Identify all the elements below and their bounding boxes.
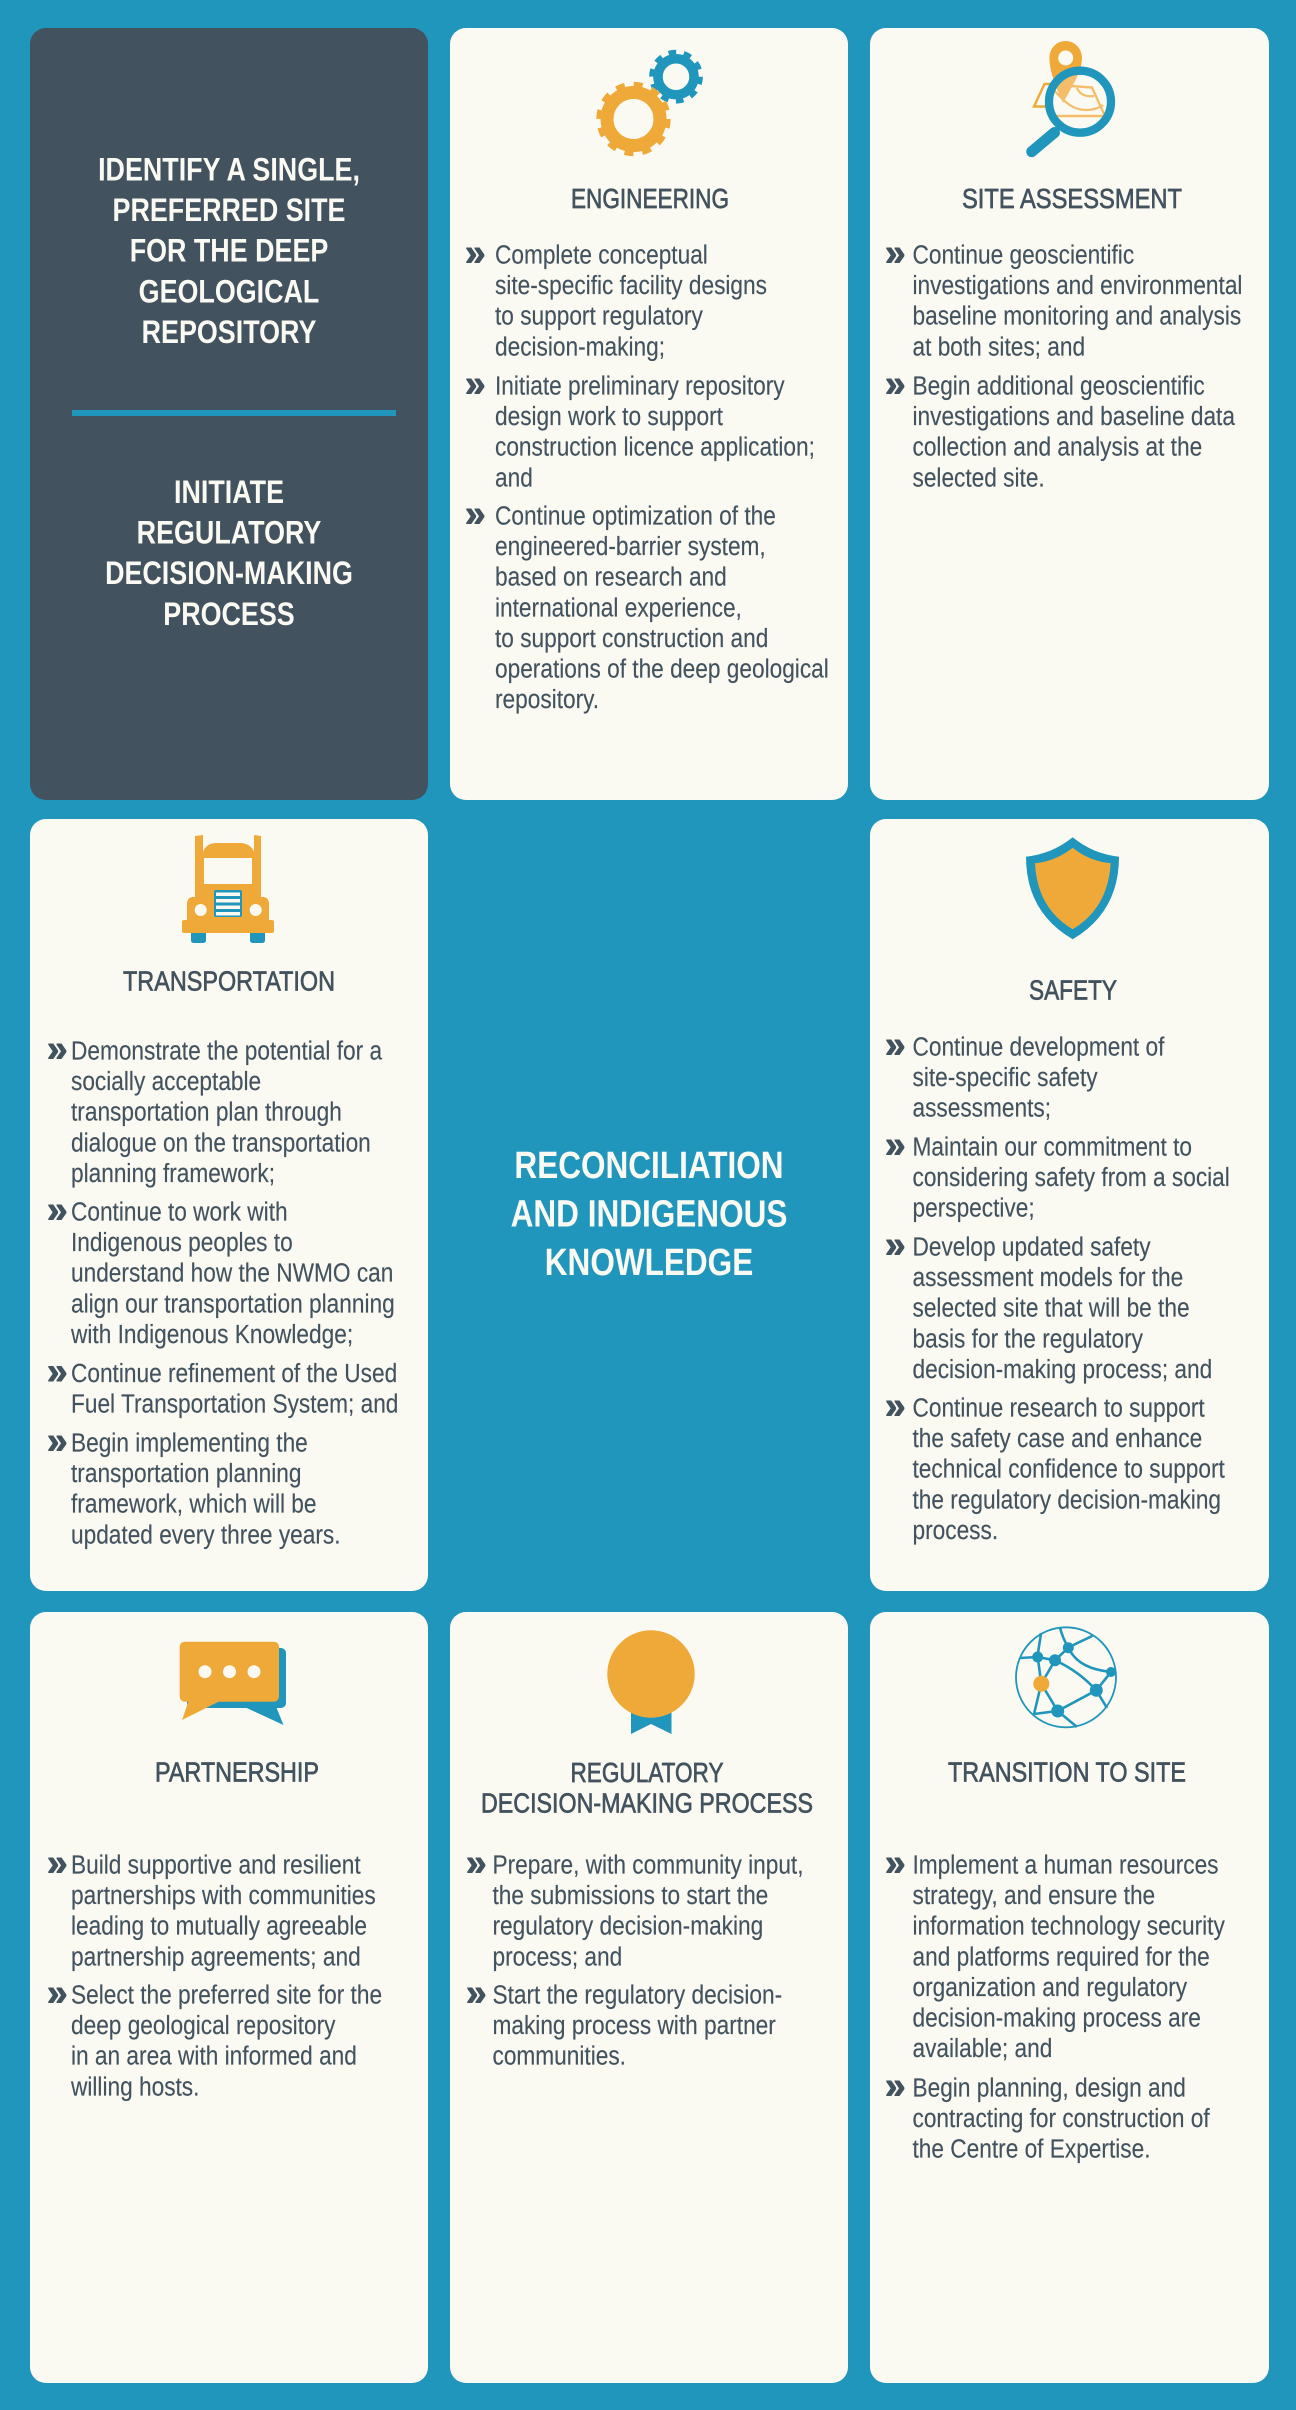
list item: Centre of Expertise: » (885, 2065, 906, 2106)
list item: safety assessments (885, 1024, 1165, 1123)
list item: select preferred site: in an area with informed and (71, 2042, 357, 2071)
list item: prepare submissions: regulatory decision-making (492, 1912, 763, 1941)
list item: conceptual designs: to support regulatory (495, 302, 704, 331)
list item: human resources strategy: and platforms required for the (912, 1943, 1210, 1972)
list item: start regulatory process: making process with partner (492, 2012, 776, 2040)
list item: start regulatory process: Start the regulatory decision- (492, 1981, 782, 2010)
list item: planning framework: transportation planning (71, 1460, 302, 1488)
list item: start regulatory process: » (466, 1972, 487, 2013)
heading: regulatory decision-making process: DECISION-MAKING PROCESS (481, 1788, 813, 1818)
heading: identify a single site: FOR THE DEEP (130, 234, 328, 269)
panel: goal (30, 28, 428, 800)
list item: conceptual designs: decision-making; (495, 333, 665, 362)
icon: shield (1026, 837, 1119, 939)
list item: transportation plan: planning framework; (71, 1160, 275, 1188)
list item: select preferred site: » (47, 1972, 68, 2013)
list item: social perspective (885, 1124, 1230, 1223)
list item: preliminary design (465, 363, 815, 493)
list item: Centre of Expertise (885, 2065, 1210, 2164)
center heading: reconciliation and Indigenous Knowledge: RECONCILIATION (514, 1144, 784, 1187)
list item: engineered-barrier optimization: international experience, (495, 594, 742, 623)
panel: engineering (450, 28, 848, 800)
list item: continue investigations: investigations and environmental (912, 272, 1242, 300)
heading: transportation: TRANSPORTATION (123, 966, 335, 996)
heading: site assessment: SITE ASSESSMENT (962, 183, 1182, 214)
list item: build partnerships: partnership agreements; and (71, 1943, 361, 1972)
list item: additional investigations (885, 363, 1235, 493)
list item: updated models: » (885, 1224, 906, 1265)
list item: continue investigations: Continue geoscientific (912, 241, 1134, 270)
heading: initiate regulatory process: INITIATE (174, 475, 284, 511)
list item: prepare submissions: the submissions to start the (492, 1882, 768, 1910)
list item: Centre of Expertise: the Centre of Expertise. (912, 2135, 1151, 2164)
heading: identify a single site: REPOSITORY (142, 315, 317, 350)
list item: conceptual designs: Complete conceptual (495, 241, 708, 270)
list item: continue investigations: at both sites; and (912, 333, 1085, 362)
list item: select preferred site: willing hosts. (70, 2073, 199, 2102)
list item: safety research: Continue research to support (912, 1394, 1205, 1423)
panel: regulatory decision-making process (450, 1612, 848, 2383)
list item: continue investigations: » (885, 232, 906, 273)
heading: identify a single site: GEOLOGICAL (139, 274, 319, 310)
list item: social perspective: perspective; (912, 1194, 1035, 1223)
list item: start regulatory process (466, 1972, 782, 2071)
list item: work with Indigenous peoples: align our transportation planning (71, 1290, 395, 1319)
list item: planning framework: » (47, 1420, 68, 1461)
heading: regulatory decision-making process (481, 1757, 813, 1818)
list item: preliminary design: construction licence application; (495, 433, 815, 462)
panel: partnership (30, 1612, 428, 2383)
list item: engineered-barrier optimization: to support construction and (495, 625, 768, 653)
list item: planning framework: updated every three years. (71, 1521, 341, 1550)
icon: gears (598, 52, 701, 154)
list item: select preferred site (47, 1972, 382, 2102)
heading: initiate regulatory process: DECISION-MAKING (105, 556, 353, 592)
list item: work with Indigenous peoples (47, 1189, 395, 1349)
list item: select preferred site: Select the preferred site for the (71, 1981, 382, 2010)
list item: social perspective: Maintain our commitment to (912, 1133, 1192, 1162)
center heading: reconciliation and Indigenous Knowledge: KNOWLEDGE (545, 1241, 753, 1284)
heading: initiate regulatory process: PROCESS (163, 597, 295, 632)
list item: continue investigations (885, 232, 1242, 362)
list item: transportation system: Continue refinement of the Used (71, 1360, 397, 1388)
list item: build partnerships: Build supportive and resilient (71, 1851, 361, 1880)
list item: work with Indigenous peoples: Indigenous peoples to (71, 1229, 293, 1257)
list item: transportation system (47, 1350, 398, 1419)
list item: human resources strategy: organization and regulatory (912, 1974, 1188, 2002)
list item: human resources strategy: decision-making process are (912, 2004, 1201, 2033)
list item: conceptual designs: site-specific facility designs (495, 272, 767, 300)
list item: safety assessments: Continue development of (912, 1033, 1165, 1062)
list item: additional investigations: collection and analysis at the (912, 433, 1202, 462)
panel: safety (870, 819, 1269, 1591)
list item: conceptual designs (465, 232, 767, 362)
list item: updated models: Develop updated safety (912, 1233, 1151, 1262)
list item: continue investigations: baseline monitoring and analysis (912, 302, 1241, 331)
panel: transition to site (870, 1612, 1269, 2383)
list item: select preferred site: deep geological repository (71, 2012, 336, 2040)
center heading: reconciliation and Indigenous Knowledge: AND INDIGENOUS (511, 1193, 787, 1235)
list item: updated models: basis for the regulatory (912, 1325, 1144, 1354)
list item: Centre of Expertise: Begin planning, design and (912, 2074, 1186, 2103)
list item: build partnerships: » (47, 1842, 68, 1883)
list item: engineered-barrier optimization: repository. (495, 686, 599, 714)
list item: Centre of Expertise: contracting for construction of (912, 2105, 1210, 2133)
list item: transportation system: » (47, 1350, 68, 1392)
list item: human resources strategy: Implement a human resources (912, 1851, 1218, 1880)
icon: medal (607, 1630, 695, 1734)
list item: preliminary design: » (465, 363, 486, 404)
list item: human resources strategy (885, 1842, 1226, 2063)
list item: safety research: » (885, 1385, 906, 1426)
list item: build partnerships (47, 1842, 376, 1972)
list item: social perspective: considering safety from a social (912, 1164, 1230, 1192)
icon: network globe (1016, 1627, 1116, 1727)
list item: transportation plan: socially acceptable (71, 1068, 261, 1096)
list item: engineered-barrier optimization: Continue optimization of the (495, 502, 776, 531)
list item: additional investigations: selected site. (912, 464, 1045, 493)
list item: build partnerships: partnerships with communities (71, 1882, 376, 1910)
list item: safety research: process. (912, 1517, 998, 1545)
list item: prepare submissions: process; and (492, 1943, 622, 1972)
list item: work with Indigenous peoples: » (47, 1189, 68, 1230)
list item: prepare submissions (466, 1842, 804, 1972)
list item: additional investigations: Begin additional geoscientific (912, 372, 1205, 401)
list item: safety assessments: » (885, 1024, 906, 1065)
heading: identify a single site: IDENTIFY A SINGLE, (98, 152, 360, 188)
list item: engineered-barrier optimization: engineered-barrier system, (495, 533, 766, 561)
list item: engineered-barrier optimization: based on research and (495, 563, 727, 592)
heading: safety: SAFETY (1029, 974, 1117, 1006)
list item: safety research: technical confidence to support (912, 1455, 1225, 1484)
list item: conceptual designs: » (465, 232, 486, 273)
list item: transportation plan: transportation plan through (71, 1098, 342, 1127)
list item: safety research: the safety case and enhance (912, 1425, 1202, 1453)
list item: transportation plan (47, 1028, 382, 1188)
panel: site assessment (870, 28, 1269, 800)
list item: social perspective: » (885, 1124, 906, 1165)
list item: safety research: the regulatory decision-making (912, 1486, 1221, 1515)
list item: additional investigations: » (885, 363, 906, 404)
heading: identify a single site: PREFERRED SITE (113, 193, 345, 229)
list item: prepare submissions: » (466, 1842, 487, 1883)
heading: initiate regulatory process: REGULATORY (137, 515, 322, 551)
list item: updated models: selected site that will be the (912, 1294, 1190, 1323)
heading: partnership: PARTNERSHIP (155, 1756, 319, 1788)
list item: planning framework (47, 1420, 341, 1550)
list item: engineered-barrier optimization: » (465, 493, 486, 534)
icon: truck (182, 835, 274, 943)
list item: transportation plan: dialogue on the transportation (71, 1129, 371, 1158)
list item: safety assessments: assessments; (912, 1094, 1051, 1123)
list item: updated models: assessment models for the (912, 1264, 1183, 1292)
list item: human resources strategy: information technology security (912, 1912, 1226, 1941)
heading: transition to site: TRANSITION TO SITE (948, 1756, 1186, 1788)
list item: preliminary design: design work to support (495, 403, 723, 431)
list item: engineered-barrier optimization: operations of the deep geological (495, 655, 829, 684)
icon: map pin and magnifier (1032, 41, 1111, 152)
list item: safety assessments: site-specific safety (912, 1064, 1098, 1092)
list item: preliminary design: Initiate preliminary repository (495, 372, 785, 401)
list item: engineered-barrier optimization (465, 493, 829, 714)
list item: updated models (885, 1224, 1212, 1384)
list item: work with Indigenous peoples: Continue to work with (71, 1198, 288, 1227)
list item: transportation plan: » (47, 1028, 68, 1069)
list item: prepare submissions: Prepare, with community input, (492, 1851, 804, 1880)
heading: engineering: ENGINEERING (571, 183, 729, 214)
icon: speech bubbles (180, 1642, 286, 1725)
list item: updated models: decision-making process; and (912, 1356, 1212, 1384)
heading: regulatory decision-making process: REGULATORY (570, 1757, 724, 1788)
list item: transportation plan: Demonstrate the potential for a (71, 1037, 382, 1066)
list item: human resources strategy: » (885, 1842, 906, 1883)
list item: planning framework: Begin implementing the (71, 1429, 308, 1458)
panel: transportation (30, 819, 428, 1591)
list item: human resources strategy: available; and (912, 2035, 1052, 2063)
list item: work with Indigenous peoples: with Indigenous Knowledge; (70, 1321, 353, 1349)
list item: build partnerships: leading to mutually agreeable (71, 1912, 367, 1941)
list item: planning framework: framework, which will be (71, 1490, 317, 1519)
list item: human resources strategy: strategy, and ensure the (912, 1882, 1155, 1910)
list item: work with Indigenous peoples: understand how the NWMO can (71, 1259, 393, 1288)
list item: additional investigations: investigations and baseline data (912, 403, 1235, 431)
list item: start regulatory process: communities. (492, 2042, 626, 2071)
list item: safety research (885, 1385, 1225, 1545)
list item: preliminary design: and (495, 464, 533, 493)
list item: transportation system: Fuel Transportation System; and (71, 1390, 398, 1419)
